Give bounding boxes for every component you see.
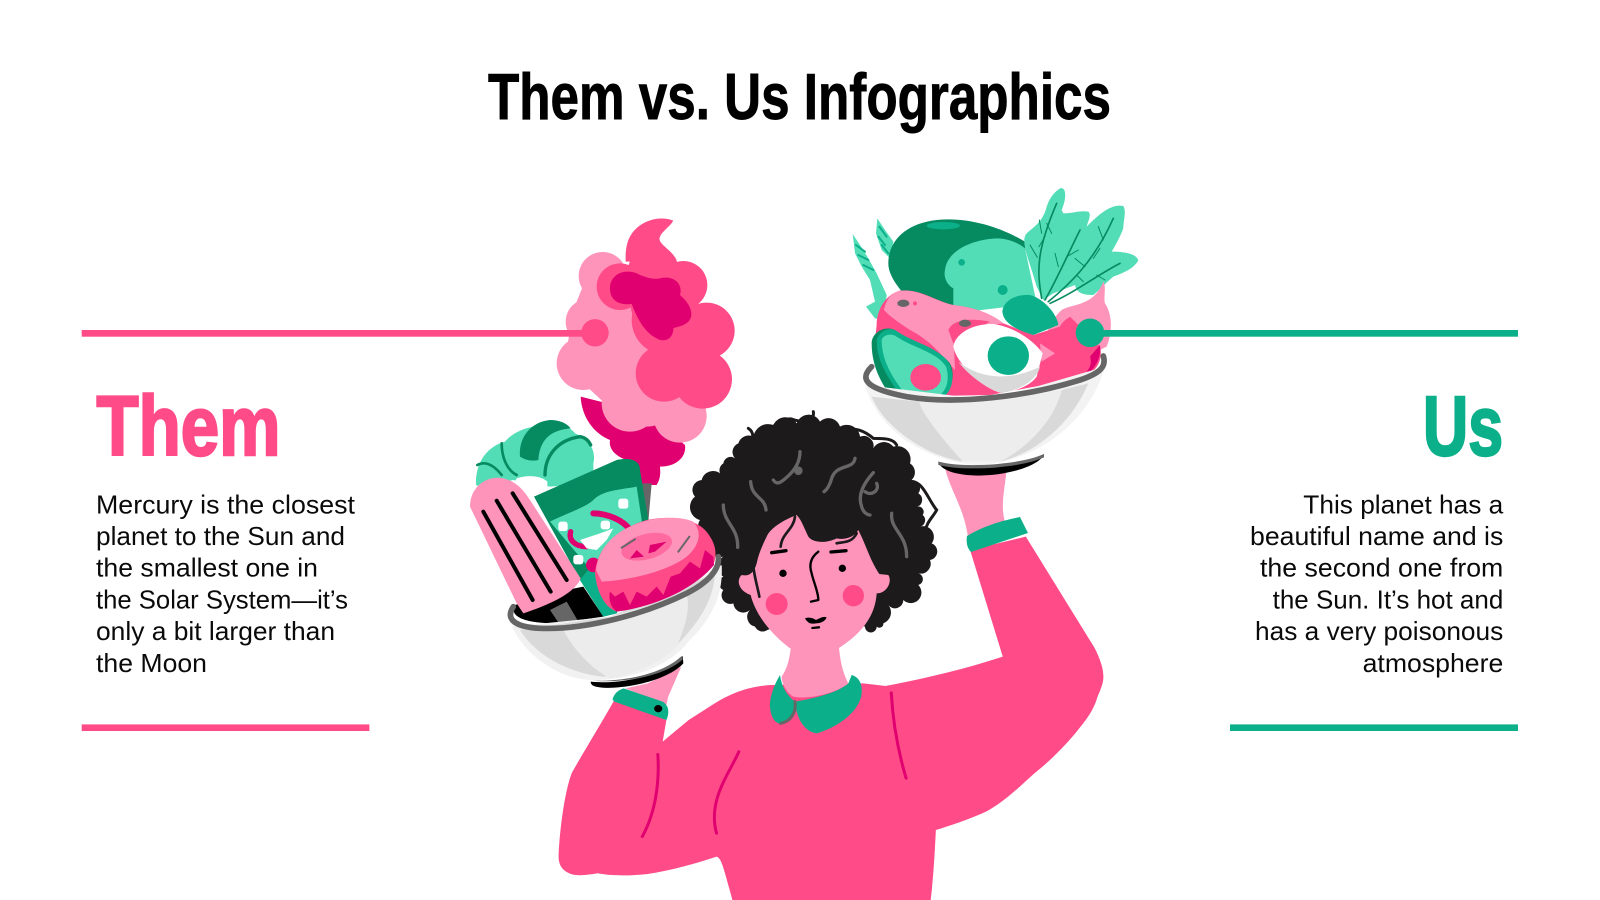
egg [953, 324, 1055, 393]
hair mass [690, 415, 937, 632]
popsicle [470, 478, 581, 613]
hair wisps [742, 412, 937, 532]
connector: them line and dot [82, 319, 609, 346]
cotton candy and croissant [476, 218, 735, 493]
left bowl with sweets [470, 459, 722, 688]
face [739, 515, 890, 648]
candy stick [638, 483, 652, 522]
text block: them description [96, 491, 355, 678]
leafy greens [1024, 188, 1138, 303]
neck [782, 640, 848, 698]
text block: us description [1250, 491, 1504, 678]
bowl interior [514, 587, 603, 623]
text block: them description: planet to the Sun and [96, 523, 345, 551]
right hand and cuff [945, 465, 1028, 552]
donut [595, 518, 716, 612]
rule: us bottom [1230, 724, 1518, 731]
facial features [766, 551, 864, 628]
text block: them description: the smallest one in [96, 555, 318, 583]
asparagus [853, 218, 893, 320]
head [690, 412, 937, 733]
text block: us description: the second one from [1260, 555, 1503, 583]
illustration: person holding two bowls [470, 188, 1138, 900]
text block: us description: the Sun. It’s hot and [1273, 586, 1503, 614]
text block: them description: the Moon [96, 650, 207, 678]
steak [873, 290, 1101, 397]
rule: them bottom [82, 724, 369, 731]
fringe strands [753, 517, 857, 597]
text block: us description: This planet has a [1303, 491, 1504, 519]
candy base [581, 397, 685, 485]
panel: them [82, 379, 369, 731]
green fruit [1002, 295, 1058, 335]
candy dark swirl [610, 272, 691, 340]
popsicle stick [550, 602, 578, 625]
bread [888, 219, 1037, 313]
pizza slice [534, 459, 648, 617]
right bowl with healthy food [853, 188, 1138, 476]
panel: us [1230, 379, 1518, 731]
text block: us description: beautiful name and is [1250, 523, 1503, 551]
sweater creases [642, 693, 906, 837]
text block: them description: Mercury is the closest [96, 491, 355, 519]
bowl [510, 557, 722, 688]
radish [1047, 282, 1111, 350]
heading: us: Us [1423, 379, 1503, 473]
grey hair curls [723, 452, 907, 557]
candy mid cloud [597, 218, 735, 409]
candy light cloud [557, 252, 707, 443]
croissant [476, 420, 594, 493]
connector: us line and dot [1076, 318, 1518, 347]
text block: them description: only a bit larger than [96, 618, 335, 646]
text block: them description: the Solar System—it’s [96, 586, 348, 614]
left wrist and cuff [612, 667, 681, 720]
avocado [872, 329, 953, 397]
body: pink sweater [559, 537, 1103, 900]
text block: us description: atmosphere [1363, 650, 1503, 678]
text block: us description: has a very poisonous [1255, 618, 1503, 646]
collar [770, 675, 862, 733]
title: Them vs. Us Infographics [488, 60, 1111, 133]
bowl [865, 356, 1105, 476]
heading: them: Them [96, 379, 280, 473]
